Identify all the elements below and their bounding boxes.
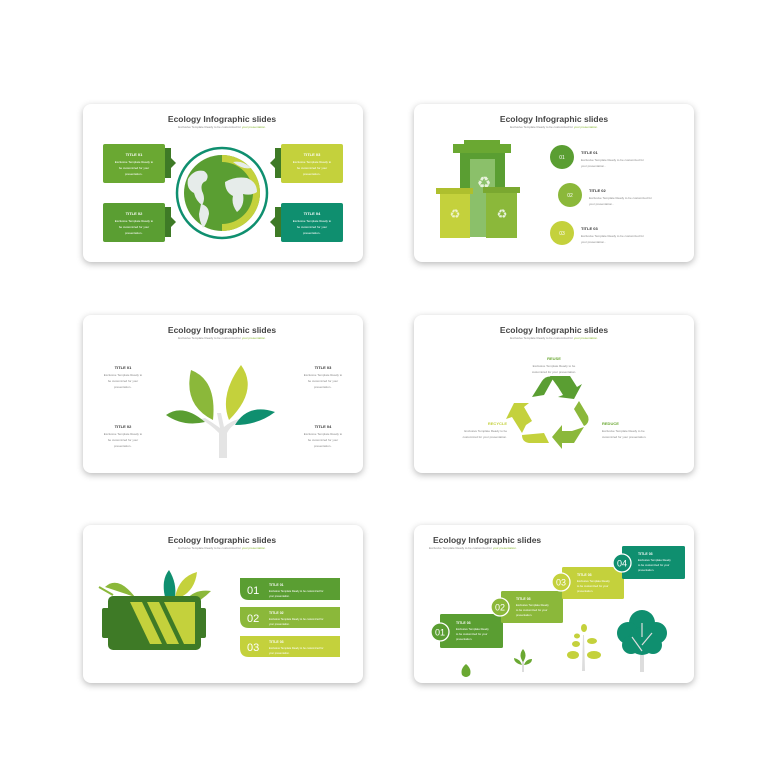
icon: recycle bins: ♻ bbox=[497, 207, 507, 221]
item 03: 03 bbox=[559, 231, 565, 237]
step 04: TITLE 03 bbox=[638, 552, 653, 556]
title bbox=[168, 114, 276, 129]
icon: seed leaf bbox=[462, 664, 470, 677]
title bbox=[500, 114, 608, 129]
step 02 bbox=[491, 591, 563, 623]
item 02: your presentation.. bbox=[589, 202, 614, 206]
text: title 01: presentation.. bbox=[114, 385, 132, 389]
item 03: your presentation.. bbox=[581, 240, 606, 244]
panel: growth steps slide bbox=[414, 525, 694, 683]
box: title 02: presentation.. bbox=[125, 231, 143, 235]
title: Ecology Infographic slides bbox=[168, 325, 276, 335]
item 03: your presentation. bbox=[269, 651, 290, 655]
text: title 04: Exclusive Template Ready to bbox=[304, 432, 343, 436]
box: title 04 bbox=[270, 203, 343, 242]
text: reuse: customized for your presentation. bbox=[532, 370, 576, 374]
text: recycle bbox=[463, 421, 507, 439]
step 04: Exclusive Template Ready bbox=[638, 558, 671, 562]
title: Exclusive Template Ready to be customized for your presentation. bbox=[510, 336, 598, 340]
item 03: Exclusive Template Ready to be customized for bbox=[581, 234, 644, 238]
text: title 04: TITLE 04 bbox=[315, 424, 332, 429]
title: Exclusive Template Ready to be customized for your presentation. bbox=[178, 546, 266, 550]
box: title 03: presentation.. bbox=[303, 172, 321, 176]
title: Ecology Infographic slides bbox=[500, 114, 608, 124]
step 01 bbox=[431, 614, 503, 648]
title: Exclusive Template Ready to be customized for your presentation. bbox=[429, 546, 517, 550]
step 02: TITLE 03 bbox=[516, 597, 531, 601]
item 02: Exclusive Template Ready to be customized for bbox=[589, 196, 652, 200]
item 01: 01 bbox=[559, 155, 565, 161]
title: Ecology Infographic slides bbox=[500, 325, 608, 335]
item 01: your presentation.. bbox=[581, 164, 606, 168]
box: title 02: Exclusive Template Ready to bbox=[115, 219, 154, 223]
text: title 01: be customized for your bbox=[108, 379, 138, 383]
item 03: Exclusive Template Ready to be customized for bbox=[269, 646, 324, 650]
item 01: TITLE 01 bbox=[581, 150, 598, 155]
step 02: Exclusive Template Ready bbox=[516, 603, 549, 607]
item 01: Exclusive Template Ready to be customized for bbox=[581, 158, 644, 162]
text: title 01: TITLE 01 bbox=[115, 365, 132, 370]
text: title 01 bbox=[104, 365, 143, 389]
text: title 03: be customized for your bbox=[308, 379, 338, 383]
step 04: to be customized for your bbox=[638, 563, 669, 567]
step 03: to be customized for your bbox=[577, 584, 608, 588]
icon: recycle bins: ♻ bbox=[450, 207, 460, 221]
step 02: to be customized for your bbox=[516, 608, 547, 612]
title bbox=[500, 325, 608, 340]
step 03: Exclusive Template Ready bbox=[577, 579, 610, 583]
box: title 04: be customized for your bbox=[297, 225, 327, 229]
item 01 bbox=[240, 578, 340, 600]
box: title 02 bbox=[103, 203, 176, 242]
text: title 02: TITLE 02 bbox=[115, 424, 132, 429]
item 02: 02 bbox=[247, 613, 259, 625]
box: title 03: be customized for your bbox=[297, 166, 327, 170]
text: title 03: presentation.. bbox=[314, 385, 332, 389]
text: title 02: Exclusive Template Ready to bbox=[104, 432, 143, 436]
item 01: Exclusive Template Ready to be customized for bbox=[269, 589, 324, 593]
step 01: to be customized for your bbox=[456, 632, 487, 636]
item 03: TITLE 03 bbox=[581, 226, 598, 231]
title: Ecology Infographic slides bbox=[168, 114, 276, 124]
item 01: your presentation. bbox=[269, 594, 290, 598]
icon: sprout bbox=[514, 649, 532, 672]
item 02: Exclusive Template Ready to be customized for bbox=[269, 617, 324, 621]
step 03: TITLE 03 bbox=[577, 573, 592, 577]
text: title 02: be customized for your bbox=[108, 438, 138, 442]
text: recycle: RECYCLE bbox=[488, 421, 507, 426]
item 01 bbox=[550, 145, 644, 169]
text: reduce bbox=[602, 421, 647, 439]
icon: small tree bbox=[567, 624, 601, 671]
title bbox=[168, 535, 276, 550]
panel: battery slide bbox=[83, 525, 363, 683]
step 01: TITLE 03 bbox=[456, 621, 471, 625]
text: title 02: presentation.. bbox=[114, 444, 132, 448]
step 02: 02 bbox=[495, 602, 505, 612]
text: reduce: REDUCE bbox=[602, 421, 619, 426]
panel: globe slide bbox=[83, 104, 363, 262]
text: title 01: Exclusive Template Ready to bbox=[104, 373, 143, 377]
panel: bins slide bbox=[414, 104, 694, 262]
item 02 bbox=[558, 183, 652, 207]
icon: globe bbox=[177, 148, 267, 238]
box: title 02: be customized for your bbox=[119, 225, 149, 229]
panel: tree leaves slide bbox=[83, 315, 363, 473]
icon: recycle bins: ♻ bbox=[477, 175, 491, 192]
text: reduce: customized for your presentation. bbox=[602, 435, 647, 439]
item 03: 03 bbox=[247, 642, 259, 654]
title: Ecology Infographic slides bbox=[433, 535, 541, 545]
title: Exclusive Template Ready to be customized for your presentation. bbox=[178, 336, 266, 340]
box: title 01: be customized for your bbox=[119, 166, 149, 170]
text: title 03: TITLE 03 bbox=[315, 365, 332, 370]
step 03: 03 bbox=[556, 578, 566, 588]
text: title 04: presentation.. bbox=[314, 444, 332, 448]
step 04: 04 bbox=[617, 558, 627, 568]
text: reduce: Exclusive Template Ready to be bbox=[602, 429, 645, 433]
box: title 03 bbox=[270, 144, 343, 183]
box: title 01: TITLE 01 bbox=[126, 152, 143, 157]
item 02 bbox=[240, 607, 340, 628]
icon: recycle bins bbox=[436, 140, 520, 238]
box: title 04: presentation.. bbox=[303, 231, 321, 235]
item 03 bbox=[550, 221, 644, 245]
text: title 03 bbox=[304, 365, 343, 389]
item 02: TITLE 02 bbox=[269, 611, 284, 615]
title: Exclusive Template Ready to be customized for your presentation. bbox=[178, 125, 266, 129]
step 03: presentation. bbox=[577, 589, 593, 593]
text: recycle: Exclusive Template Ready to be bbox=[464, 429, 507, 433]
step 01: presentation. bbox=[456, 637, 472, 641]
step 03 bbox=[552, 567, 624, 599]
box: title 03: TITLE 03 bbox=[304, 152, 321, 157]
step 01: Exclusive Template Ready bbox=[456, 627, 489, 631]
text: recycle: customized for your presentation. bbox=[463, 435, 507, 439]
step 02: presentation. bbox=[516, 613, 532, 617]
title: Ecology Infographic slides bbox=[168, 535, 276, 545]
text: title 04 bbox=[304, 424, 343, 448]
box: title 01: presentation.. bbox=[125, 172, 143, 176]
text: reuse: Exclusive Template Ready to be bbox=[533, 364, 576, 368]
text: reuse bbox=[532, 356, 576, 374]
title bbox=[429, 535, 541, 550]
item 03 bbox=[240, 636, 340, 657]
text: title 04: be customized for your bbox=[308, 438, 338, 442]
icon: tree with leaves bbox=[166, 365, 275, 458]
title bbox=[168, 325, 276, 340]
icon: battery with leaves bbox=[99, 570, 211, 650]
item 01: 01 bbox=[247, 585, 259, 597]
panel: recycle slide bbox=[414, 315, 694, 473]
text: reuse: REUSE bbox=[547, 356, 561, 361]
step 01: 01 bbox=[435, 628, 445, 638]
item 02: TITLE 02 bbox=[589, 188, 606, 193]
box: title 04: TITLE 04 bbox=[304, 211, 321, 216]
box: title 02: TITLE 02 bbox=[126, 211, 143, 216]
title: Exclusive Template Ready to be customized for your presentation. bbox=[510, 125, 598, 129]
text: title 02 bbox=[104, 424, 143, 448]
step 04: presentation. bbox=[638, 568, 654, 572]
item 02: your presentation. bbox=[269, 622, 290, 626]
icon: recycle arrows bbox=[506, 376, 588, 449]
text: title 03: Exclusive Template Ready to bbox=[304, 373, 343, 377]
box: title 01: Exclusive Template Ready to bbox=[115, 160, 154, 164]
box: title 01 bbox=[103, 144, 176, 183]
step 04 bbox=[613, 546, 685, 579]
box: title 03: Exclusive Template Ready to bbox=[293, 160, 332, 164]
icon: big tree bbox=[617, 610, 667, 672]
item 03: TITLE 03 bbox=[269, 640, 284, 644]
box: title 04: Exclusive Template Ready to bbox=[293, 219, 332, 223]
item 02: 02 bbox=[567, 193, 573, 199]
item 01: TITLE 01 bbox=[269, 583, 284, 587]
